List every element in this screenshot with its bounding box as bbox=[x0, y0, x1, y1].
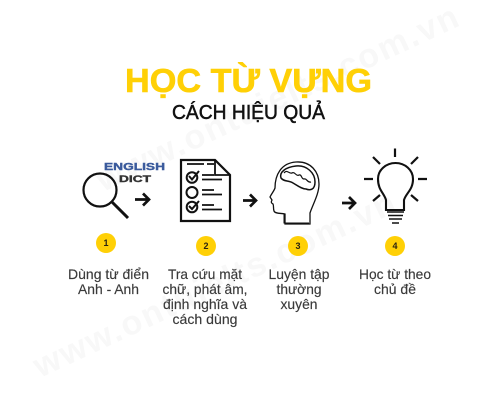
caption 1: Dùng từ điển bbox=[68, 266, 149, 282]
subtitle: CÁCH HIỆU QUẢ bbox=[172, 101, 326, 124]
badge 2: 2 bbox=[203, 241, 209, 251]
caption 3: Luyện tập bbox=[268, 266, 330, 282]
caption 3: xuyên bbox=[280, 296, 318, 312]
badge 4: 4 bbox=[392, 241, 398, 251]
caption 4 bbox=[359, 266, 431, 297]
label: Dict: DICT bbox=[119, 174, 151, 185]
badge 3: 3 bbox=[295, 241, 301, 251]
caption 4: chủ đề bbox=[374, 281, 416, 297]
arrow 1 bbox=[135, 194, 149, 206]
caption 2: chữ, phát âm, bbox=[162, 281, 248, 297]
arrow 3 bbox=[342, 197, 355, 209]
caption 1: Anh - Anh bbox=[78, 281, 139, 297]
badge 1 bbox=[96, 233, 116, 253]
badge 3 bbox=[288, 236, 308, 256]
caption 3: thường bbox=[276, 281, 322, 297]
badge 4 bbox=[385, 236, 405, 256]
caption 2: Tra cứu mặt bbox=[168, 266, 242, 282]
badge 2 bbox=[196, 236, 216, 256]
badge 1: 1 bbox=[103, 238, 109, 248]
step 3: head with brain icon bbox=[270, 162, 319, 224]
watermark upper: www.ontuielts.com.vn bbox=[89, 0, 464, 200]
title: HỌC TỪ VỰNG bbox=[125, 62, 372, 99]
caption 3 bbox=[268, 266, 330, 312]
step 2: checklist document icon bbox=[181, 160, 230, 221]
step 1: dictionary icon bbox=[84, 161, 165, 218]
caption 1 bbox=[68, 266, 149, 297]
watermark lower: www.ontuielts.com.vn bbox=[26, 184, 401, 386]
caption 4: Học từ theo bbox=[359, 266, 431, 282]
arrow 2 bbox=[243, 194, 256, 206]
caption 2 bbox=[162, 266, 248, 327]
label: English: ENGLISH bbox=[104, 161, 165, 173]
caption 2: cách dùng bbox=[172, 311, 238, 327]
icon: magnifying glass bbox=[84, 174, 128, 218]
caption 2: định nghĩa và bbox=[163, 296, 247, 312]
step 4: light bulb icon bbox=[364, 148, 427, 223]
